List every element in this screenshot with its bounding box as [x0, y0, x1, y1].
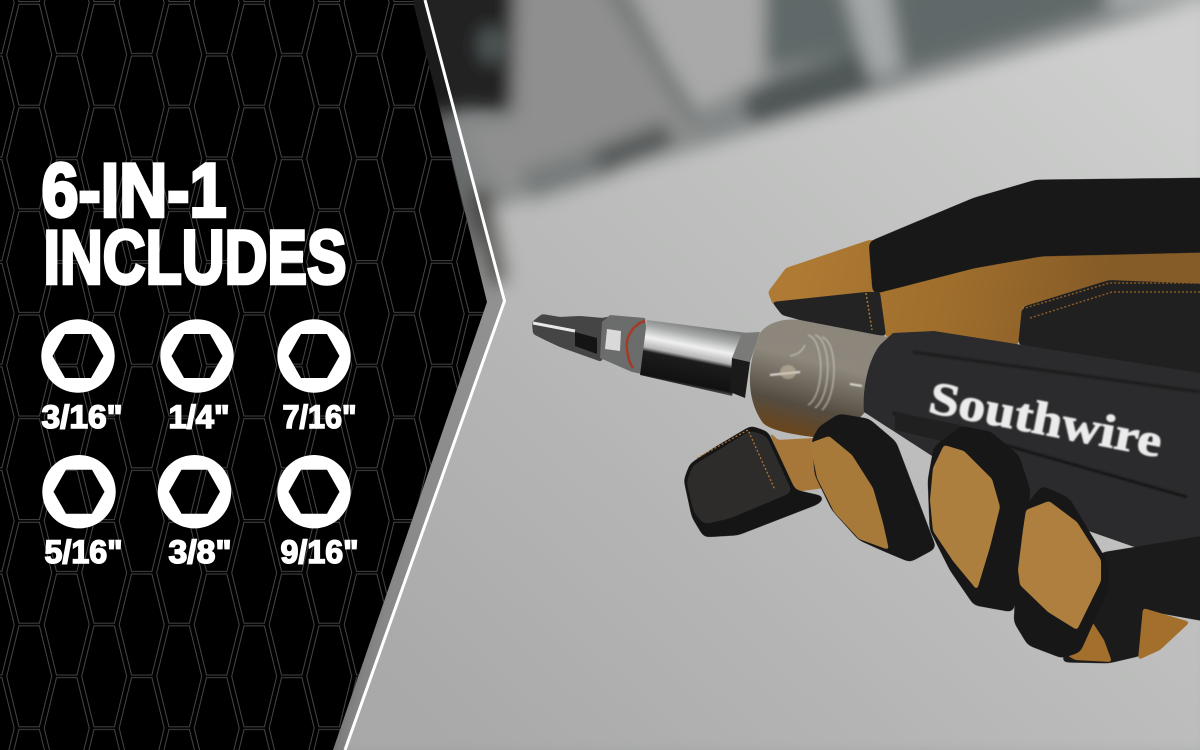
- screwdriver collar: [600, 315, 652, 376]
- chevron white outline: [345, 0, 504, 750]
- brand name on handle: Southwire: [925, 372, 1166, 468]
- thumb: [684, 426, 826, 537]
- finger 2: [928, 426, 1030, 612]
- lower glove: black base: [1060, 535, 1200, 663]
- icon: 7/16 hex socket: [277, 319, 351, 393]
- label: 1/4: 1/4": [168, 399, 230, 435]
- icon: 1/4 hex socket: [160, 319, 234, 393]
- heading: [42, 148, 346, 300]
- icon: 3/16 hex socket: [41, 319, 115, 393]
- red o-ring: [627, 321, 645, 368]
- heading: 6-IN-1: [42, 148, 226, 233]
- label: 7/16: 7/16": [282, 399, 356, 435]
- photo: gloved hand holding screwdriver: [532, 178, 1200, 663]
- heading: INCLUDES: [44, 215, 346, 300]
- label: 3/8: 3/8": [168, 534, 232, 570]
- icon: 5/16 hex socket: [42, 455, 116, 528]
- panel: black chevron with hexagon pattern: [0, 0, 487, 750]
- upper glove: palm back: [768, 178, 1200, 385]
- chevron translucent band: [333, 0, 505, 750]
- icon: 3/8 hex socket: [158, 455, 231, 528]
- icon: 9/16 hex socket: [277, 455, 351, 528]
- label: 9/16: 9/16": [280, 534, 358, 570]
- socket size icons and labels: [41, 319, 359, 570]
- chrome socket: [640, 320, 747, 396]
- finger 1: [810, 414, 936, 562]
- collar highlight: [605, 329, 621, 351]
- screwdriver handle: [864, 331, 1200, 570]
- finger 3: [1014, 486, 1108, 658]
- label: 5/16: 5/16": [44, 534, 122, 570]
- hex nut: [730, 332, 760, 398]
- label: 3/16: 3/16": [42, 399, 122, 435]
- clear ferrule: [750, 320, 893, 438]
- screwdriver tip: [532, 314, 610, 362]
